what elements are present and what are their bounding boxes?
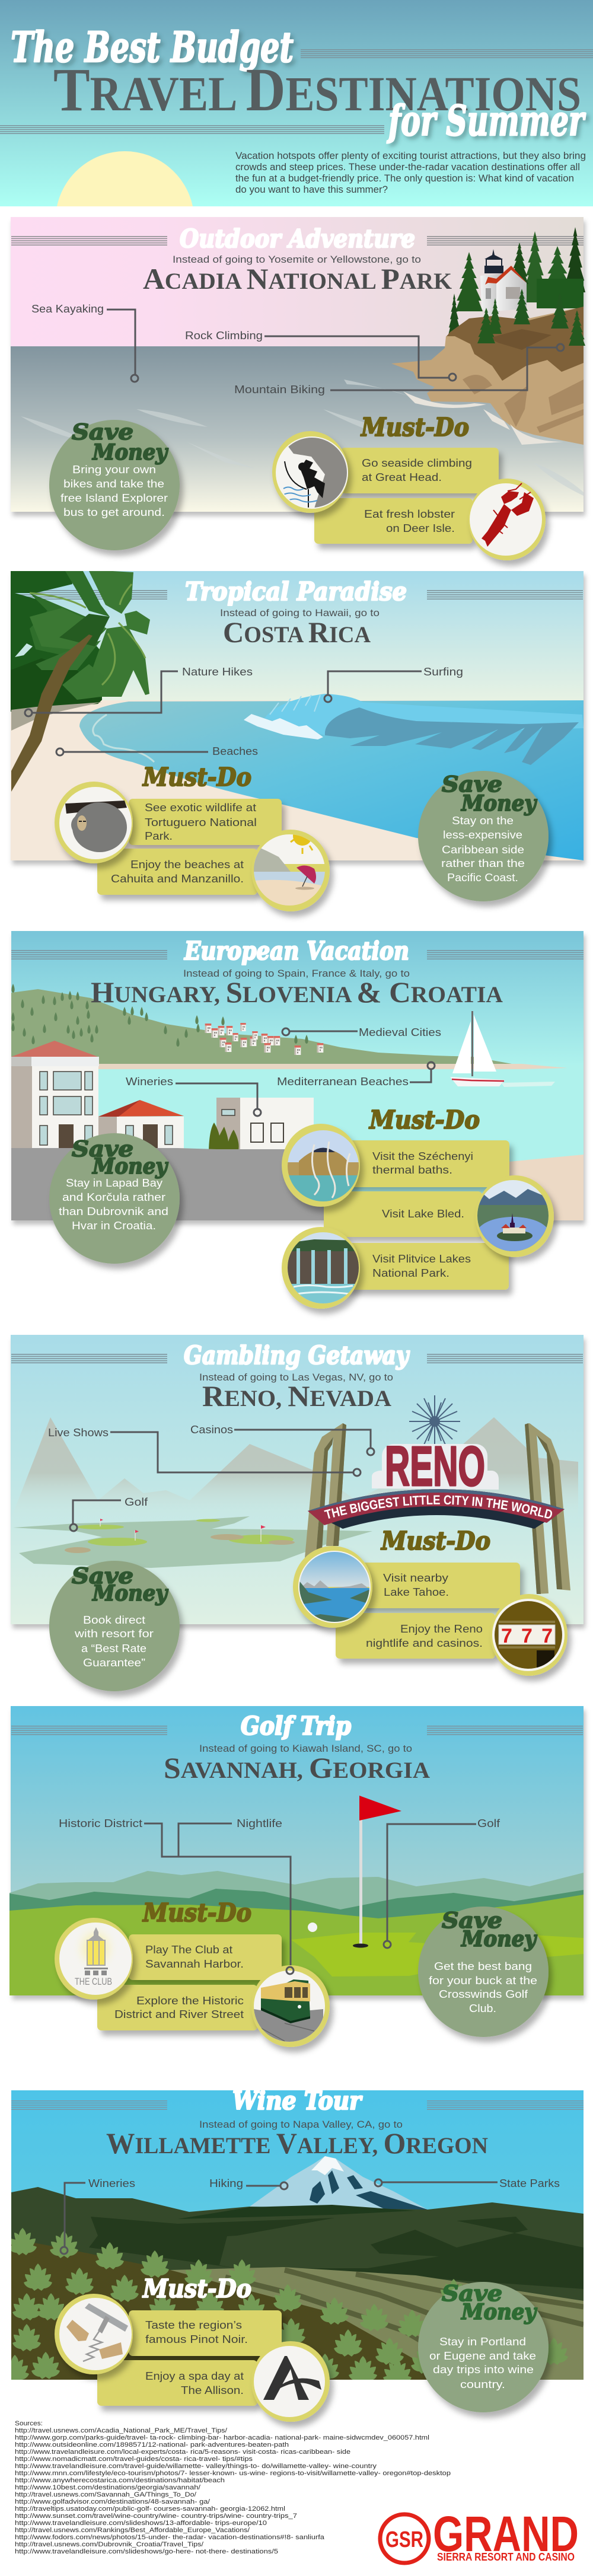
save money: Wine Tour: country. — [460, 2379, 505, 2390]
label: State Parks: State Parks — [499, 2178, 560, 2189]
logo: GSR Grand Sierra Resort and Casino: GSR — [385, 2527, 423, 2552]
save money: Outdoor Adventure: bus to get around. — [63, 506, 165, 518]
label: Golf: Golf — [125, 1496, 148, 1508]
icon: slot machine 777 — [495, 1601, 562, 1669]
label: Rock Climbing — [185, 330, 456, 381]
save money: Golf Trip: Money — [460, 1927, 537, 1952]
label: Mediterranean Beaches — [277, 1062, 435, 1088]
save money: Gambling Getaway: Money — [91, 1581, 168, 1606]
save money: Wine Tour: or Eugene and take — [429, 2350, 536, 2362]
title: The Best Budget: The Best Budget — [11, 23, 294, 72]
icon: rock climber — [276, 437, 350, 508]
save money: Gambling Getaway: Save — [72, 1564, 133, 1589]
sources: http://www.10best.com/destinations/georgia/savannah/ — [15, 2484, 201, 2491]
sources: http://travel.usnews.com/Acadia_National_Park_ME/Travel_Tips/ — [15, 2427, 228, 2434]
label: Medieval Cities — [282, 1026, 441, 1038]
save money: Tropical Paradise: Save — [442, 772, 502, 797]
must-do: Tropical Paradise: See exotic wildlife at — [145, 802, 256, 814]
must-do: Wine Tour: Taste the region’s — [145, 2319, 242, 2331]
label: Historic District — [59, 1818, 291, 1967]
must-do: Golf Trip: Savannah Harbor. — [145, 1958, 244, 1970]
label: Mediterranean Beaches: Mediterranean Beaches — [277, 1076, 409, 1088]
label: Hiking — [209, 2178, 288, 2189]
must-do: Tropical Paradise: Enjoy the beaches at — [130, 859, 244, 871]
intro text — [235, 150, 586, 195]
hillside with village — [11, 984, 568, 1069]
vineyard hills — [1, 2187, 584, 2386]
sources: Sources: — [15, 2420, 43, 2427]
save money: Golf Trip: for your buck at the — [429, 1975, 537, 1987]
save money: European Vacation: Money — [91, 1154, 168, 1179]
save money: Wine Tour: Money — [460, 2300, 537, 2325]
heading: Golf Trip: Golf Trip — [241, 1711, 351, 1740]
icon: Lake Bled — [476, 1179, 550, 1255]
destination name: HUNGARY, SLOVENIA & CROATIA — [91, 975, 503, 1009]
save money: Outdoor Adventure: Bring your own — [72, 464, 156, 476]
label: Mountain Biking: Mountain Biking — [234, 384, 325, 396]
label: State Parks — [375, 2178, 560, 2189]
save money: Tropical Paradise — [418, 771, 549, 901]
Reno arch sign — [305, 1395, 570, 1594]
label: Live Shows — [48, 1427, 361, 1476]
sources: http://www.anywherecostarica.com/destinations/habitat/beach — [15, 2477, 225, 2484]
save money: Outdoor Adventure — [49, 420, 180, 550]
must-do: Tropical Paradise: Tortuguero National — [145, 817, 257, 828]
sources: http://www.travelandleisure.com/slideshows/go-here- not-there- destinations/5 — [15, 2548, 278, 2555]
save money: Golf Trip: Get the best bang — [434, 1960, 532, 1972]
save money: Outdoor Adventure: Save — [72, 420, 133, 445]
illustration: cliff with lighthouse — [391, 227, 585, 445]
palm tree — [11, 571, 150, 792]
logo: GSR Grand Sierra Resort and Casino — [380, 2506, 579, 2563]
save money: Gambling Getaway: Guarantee” — [83, 1657, 145, 1669]
save money: Gambling Getaway: with resort for — [74, 1628, 154, 1640]
golf flag and ball — [308, 1796, 401, 1947]
save money: European Vacation: Hvar in Croatia. — [72, 1220, 156, 1232]
save money: Golf Trip: Save — [442, 1908, 502, 1933]
save money: Wine Tour: Stay in Portland — [439, 2336, 526, 2348]
must-do: Gambling Getaway: Lake Tahoe. — [384, 1586, 449, 1598]
icon: corkscrew — [59, 2298, 132, 2370]
intro text: the fun at a budget-friendly price. The only question is: What kind of vacation — [235, 173, 574, 184]
sources: http://travel.usnews.com/Savannah_GA/Things_To_Do/ — [15, 2491, 197, 2498]
must-do: Tropical Paradise: Park. — [145, 830, 173, 842]
label: Wineries — [126, 1076, 261, 1116]
must-do: Gambling Getaway: Must-Do — [380, 1526, 490, 1555]
intro text: crowds and steep prices. These under-the-radar vacation destinations offer all — [235, 161, 580, 173]
rolling hills — [9, 1871, 584, 1995]
sources: http://www.mnn.com/lifestyle/eco-tourism/photos/7- lesser-known- us-wine- regions-to-visit/willamette-valley- oregon#top-desktop — [15, 2470, 451, 2477]
label: Beaches — [56, 745, 258, 757]
must-do: European Vacation: Visit the Széchenyi — [372, 1150, 473, 1162]
must-do: Golf Trip: Play The Club at — [145, 1944, 232, 1956]
panel: European Vacation — [11, 931, 584, 1220]
label: Nightlife — [178, 1818, 282, 1857]
label: Surfing — [324, 666, 463, 702]
intro text: Vacation hotspots offer plenty of exciting tourist attractions, but they also bring — [235, 150, 586, 161]
save money: Tropical Paradise: Pacific Coast. — [447, 872, 518, 884]
must-do: Tropical Paradise — [55, 763, 330, 911]
label: Nature Hikes — [25, 666, 253, 716]
save money: Outdoor Adventure: bikes and take the — [63, 478, 164, 490]
must-do: Golf Trip: District and River Street — [114, 2008, 244, 2020]
save money: Wine Tour: day trips into wine — [433, 2364, 534, 2376]
sources: http://www.golfadvisor.com/destinations/48-savannah- ga/ — [15, 2498, 211, 2505]
must-do: European Vacation: Visit Plitvice Lakes — [372, 1253, 471, 1265]
icon: slot machine 777: 777 — [501, 1625, 553, 1647]
label: Wineries: Wineries — [88, 2178, 135, 2189]
label: Rock Climbing: Rock Climbing — [185, 330, 263, 342]
must-do: Wine Tour: The Allison. — [181, 2384, 244, 2396]
save money: European Vacation: Stay in Lapad Bay — [66, 1177, 162, 1189]
destination name: WILLAMETTE VALLEY, OREGON — [106, 2127, 488, 2160]
must-do: Outdoor Adventure: at Great Head. — [362, 471, 442, 483]
must-do: Wine Tour: Enjoy a spa day at — [145, 2370, 244, 2382]
label: Nature Hikes: Nature Hikes — [182, 666, 253, 678]
label: Historic District: Historic District — [59, 1818, 142, 1829]
save money: Tropical Paradise: Stay on the — [452, 815, 514, 827]
destination name: ACADIA NATIONAL PARK — [143, 262, 452, 295]
save money: Outdoor Adventure: Money — [91, 440, 168, 465]
must-do: Gambling Getaway: Enjoy the Reno — [400, 1623, 483, 1635]
label: Golf: Golf — [477, 1818, 500, 1829]
subtitle: Instead of going to Spain, France & Italy, go to — [183, 968, 410, 979]
save money: Tropical Paradise: Money — [460, 791, 537, 816]
label: Wineries — [60, 2178, 135, 2254]
label: Casinos — [190, 1424, 374, 1455]
must-do: Golf Trip — [55, 1898, 330, 2047]
label: Hiking: Hiking — [209, 2178, 243, 2189]
subtitle: Instead of going to Kiawah Island, SC, go to — [199, 1743, 412, 1754]
save money: Gambling Getaway: a “Best Rate — [81, 1643, 146, 1654]
must-do: Wine Tour: Must-Do — [142, 2274, 251, 2303]
must-do: Golf Trip: Must-Do — [142, 1898, 251, 1927]
panel: Tropical Paradise — [11, 571, 584, 860]
must-do: Wine Tour — [55, 2274, 330, 2422]
label: Surfing: Surfing — [423, 666, 463, 678]
label: Beaches: Beaches — [212, 745, 258, 757]
heading: European Vacation: European Vacation — [184, 936, 409, 965]
label: Sea Kayaking: Sea Kayaking — [31, 303, 104, 315]
sailboat — [450, 1011, 555, 1087]
banner text: THE BIGGEST LITTLE CITY IN THE WORLD — [324, 1496, 553, 1519]
save money: European Vacation: than Dubrovnik and — [59, 1206, 168, 1217]
icon: The Club lantern: THE CLUB — [75, 1976, 112, 1987]
buildings — [11, 1041, 325, 1220]
save money: Golf Trip: Club. — [469, 2003, 496, 2014]
subtitle: Instead of going to Hawaii, go to — [220, 607, 380, 619]
save money: Tropical Paradise: rather than the — [441, 857, 525, 869]
lighthouse — [480, 249, 527, 318]
panel: Gambling Getaway — [9, 1335, 588, 1631]
must-do: Outdoor Adventure: on Deer Isle. — [386, 522, 455, 534]
save money: Golf Trip: Crosswinds Golf — [439, 1988, 528, 2000]
must-do: Gambling Getaway — [293, 1526, 568, 1676]
save money: Golf Trip — [418, 1907, 549, 2037]
sources: http://travel.usnews.com/Rankings/Best_Affordable_Europe_Vacations/ — [15, 2527, 250, 2534]
panel: Wine Tour — [1, 2086, 584, 2386]
sources — [15, 2420, 451, 2555]
must-do: European Vacation: National Park. — [372, 1267, 449, 1279]
logo: GSR Grand Sierra Resort and Casino: SIERRA RESORT AND CASINO — [437, 2551, 575, 2563]
must-do: European Vacation: Must-Do — [368, 1105, 480, 1134]
must-do: Outdoor Adventure: Must-Do — [360, 413, 469, 442]
subtitle: Instead of going to Yosemite or Yellowstone, go to — [173, 254, 421, 265]
label: Wineries: Wineries — [126, 1076, 173, 1088]
save money: Wine Tour: Save — [442, 2281, 502, 2306]
sources: http://www.gorp.com/parks-guide/travel- ta-rock- climbing-bar- harbor-acadia- national-park- maine-sidwcmdev_060057.html — [15, 2434, 429, 2441]
label: Sea Kayaking — [31, 303, 138, 382]
sun — [57, 151, 193, 206]
must-do: Tropical Paradise: Cahuita and Manzanillo. — [111, 873, 244, 885]
icon: The Club lantern — [59, 1922, 132, 1995]
must-do: Gambling Getaway: nightlife and casinos. — [366, 1637, 483, 1649]
subtitle: Instead of going to Las Vegas, NV, go to — [199, 1372, 393, 1383]
sources: http://traveltips.usatoday.com/public-golf- courses-savannah- georgia-12062.html — [15, 2505, 285, 2513]
label: Nightlife: Nightlife — [237, 1818, 282, 1829]
intro text: do you want to have this summer? — [235, 184, 388, 195]
heading: Gambling Getaway: Gambling Getaway — [184, 1341, 410, 1370]
save money: European Vacation: and Korčula rather — [62, 1191, 165, 1203]
sources: http://www.nomadicmatt.com/travel-guides/costa- rica-travel- tips/#tips — [15, 2456, 253, 2463]
save money: Gambling Getaway — [49, 1561, 180, 1691]
must-do: Gambling Getaway: Visit nearby — [383, 1572, 448, 1584]
icon: sloth — [59, 787, 132, 859]
icon: trolley — [253, 1970, 326, 2042]
label: Live Shows: Live Shows — [48, 1427, 109, 1439]
panel: Golf Trip — [9, 1706, 584, 1995]
sources: http://www.fodors.com/news/photos/15-under- the-radar- vacation-destinations#!8- sanliurfa — [15, 2534, 325, 2541]
label: Casinos: Casinos — [190, 1424, 233, 1436]
label: Golf — [384, 1818, 500, 1948]
must-do: Outdoor Adventure — [272, 413, 546, 560]
save money: Gambling Getaway: Book direct — [83, 1614, 145, 1626]
heading: Tropical Paradise: Tropical Paradise — [185, 577, 407, 606]
icon: thermal baths — [288, 1130, 359, 1201]
sources: http://www.travelandleisure.com/local-experts/costa- rica/5-reasons- visit-costa- ricas-caribbean- side — [15, 2449, 350, 2456]
subtitle: Instead of going to Napa Valley, CA, go to — [199, 2119, 403, 2130]
label: Medieval Cities: Medieval Cities — [359, 1026, 441, 1038]
sources: http://www.sunset.com/travel/wine-country/wine- country-trips/wine- country-trips_7 — [15, 2513, 297, 2520]
save money: European Vacation: Save — [72, 1137, 133, 1162]
icon: Allison logo — [263, 2356, 321, 2400]
wave — [244, 694, 584, 765]
sources: http://www.travelandleisure.com/slideshows/13-affordable- trips-europe/10 — [15, 2520, 267, 2527]
save money: Tropical Paradise: Caribbean side — [442, 844, 524, 856]
heading: Outdoor Adventure: Outdoor Adventure — [180, 224, 415, 253]
must-do: Outdoor Adventure: Eat fresh lobster — [364, 508, 455, 520]
save money: Outdoor Adventure: free Island Explorer — [60, 492, 168, 504]
must-do: European Vacation — [282, 1105, 554, 1309]
RENO letters: RENO — [385, 1435, 485, 1498]
must-do: Golf Trip: Explore the Historic — [136, 1995, 244, 2007]
icon: lobster — [470, 483, 542, 556]
destination name: COSTA RICA — [223, 616, 371, 649]
must-do: European Vacation: Visit Lake Bled. — [382, 1208, 464, 1220]
panel: Outdoor Adventure — [11, 217, 585, 512]
must-do: Tropical Paradise: Must-Do — [142, 763, 251, 792]
must-do: Outdoor Adventure: Go seaside climbing — [362, 457, 472, 469]
golf course — [13, 1516, 372, 1568]
sources: http://www.outsideonline.com/1898571/12-national- park-adventures-beaten-path — [15, 2441, 289, 2449]
sources: http://travel.usnews.com/Dubrovnik_Croatia/Travel_Tips/ — [15, 2541, 204, 2548]
destination name: RENO, NEVADA — [202, 1379, 391, 1413]
sources: http://www.travelandleisure.com/travel-guide/willamette- valley/things-to- do/willamette-valley- wine-country — [15, 2463, 377, 2470]
destination name: SAVANNAH, GEORGIA — [164, 1751, 430, 1784]
save money: European Vacation — [49, 1133, 180, 1264]
must-do: European Vacation: thermal baths. — [372, 1164, 452, 1176]
save money: Wine Tour — [418, 2281, 549, 2412]
mountain — [250, 2156, 428, 2210]
icon: beach umbrella — [254, 834, 325, 906]
label: Golf — [70, 1496, 148, 1531]
save money: Tropical Paradise: less-expensive — [443, 829, 522, 841]
icon: Lake Tahoe — [299, 1551, 370, 1625]
icon: Plitvice waterfalls — [288, 1232, 359, 1303]
header — [0, 0, 593, 206]
must-do: Wine Tour: famous Pinot Noir. — [145, 2333, 248, 2345]
mountains — [11, 1417, 578, 1518]
label: Mountain Biking — [234, 344, 564, 396]
heading: Wine Tour: Wine Tour — [232, 2086, 363, 2115]
